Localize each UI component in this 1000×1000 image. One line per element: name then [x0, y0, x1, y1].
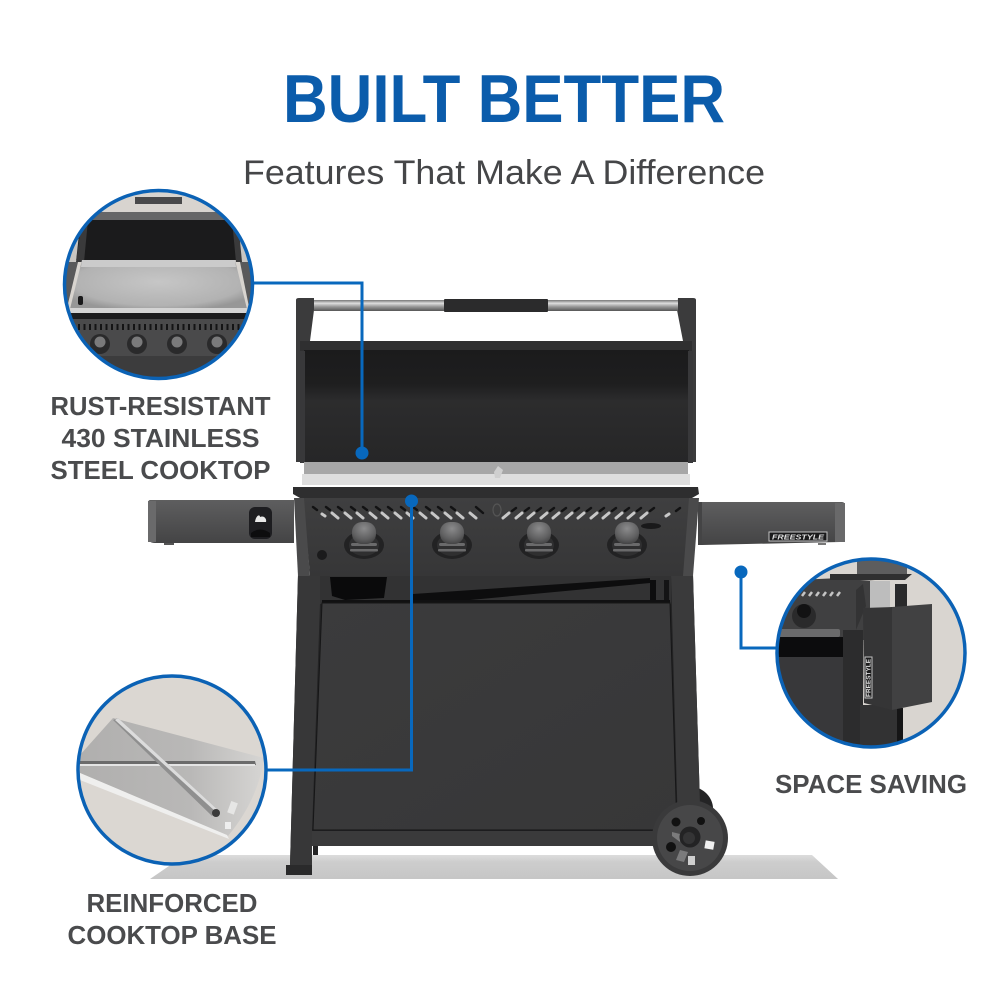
circle: reinforced base detail — [75, 673, 270, 868]
label: reinforced base: COOKTOP BASE — [68, 920, 276, 950]
label: reinforced base: REINFORCED — [86, 888, 258, 918]
label: cooktop: RUST-RESISTANT — [50, 391, 271, 421]
vent slots left — [322, 513, 669, 518]
front wheel — [652, 800, 728, 876]
knob 3 — [519, 522, 559, 559]
freestyle badge — [769, 532, 827, 541]
callout line: cooktop — [253, 283, 368, 460]
circle: space saving detail — [775, 555, 970, 758]
lid handle — [314, 300, 678, 311]
grill rear wheel — [698, 788, 713, 812]
label: cooktop — [50, 391, 271, 485]
subtitle: Features That Make A Difference — [243, 154, 765, 192]
vent slots right — [503, 513, 669, 518]
title: BUILT BETTER — [283, 61, 725, 137]
ground shadow — [150, 855, 838, 879]
grill illustration — [148, 298, 845, 876]
front lip — [293, 487, 699, 498]
cart door panel — [313, 603, 677, 830]
cooktop — [302, 462, 690, 485]
handle grip — [444, 299, 548, 312]
cart frame — [286, 575, 700, 875]
label: space saving: SPACE SAVING — [775, 769, 967, 799]
brand badge — [641, 523, 661, 529]
circle: space saving detail: FREESTYLE — [866, 659, 872, 697]
control panel — [294, 498, 699, 576]
knob 1 — [344, 522, 384, 559]
circle: cooktop detail — [60, 186, 260, 389]
knob 2 — [432, 522, 472, 559]
label: reinforced base — [68, 888, 276, 950]
logo mark — [493, 504, 501, 516]
right side shelf: FREESTYLE — [772, 532, 825, 542]
small screw — [317, 550, 327, 560]
label: cooktop: STEEL COOKTOP — [50, 455, 270, 485]
lid — [296, 298, 696, 463]
callout line: reinforced base — [267, 494, 418, 770]
callout line: space saving — [734, 566, 777, 648]
right side shelf — [698, 502, 845, 545]
burner knob — [249, 507, 272, 539]
knob 4 — [607, 522, 647, 559]
label: cooktop: 430 STAINLESS — [62, 423, 260, 453]
left side shelf — [148, 500, 294, 545]
